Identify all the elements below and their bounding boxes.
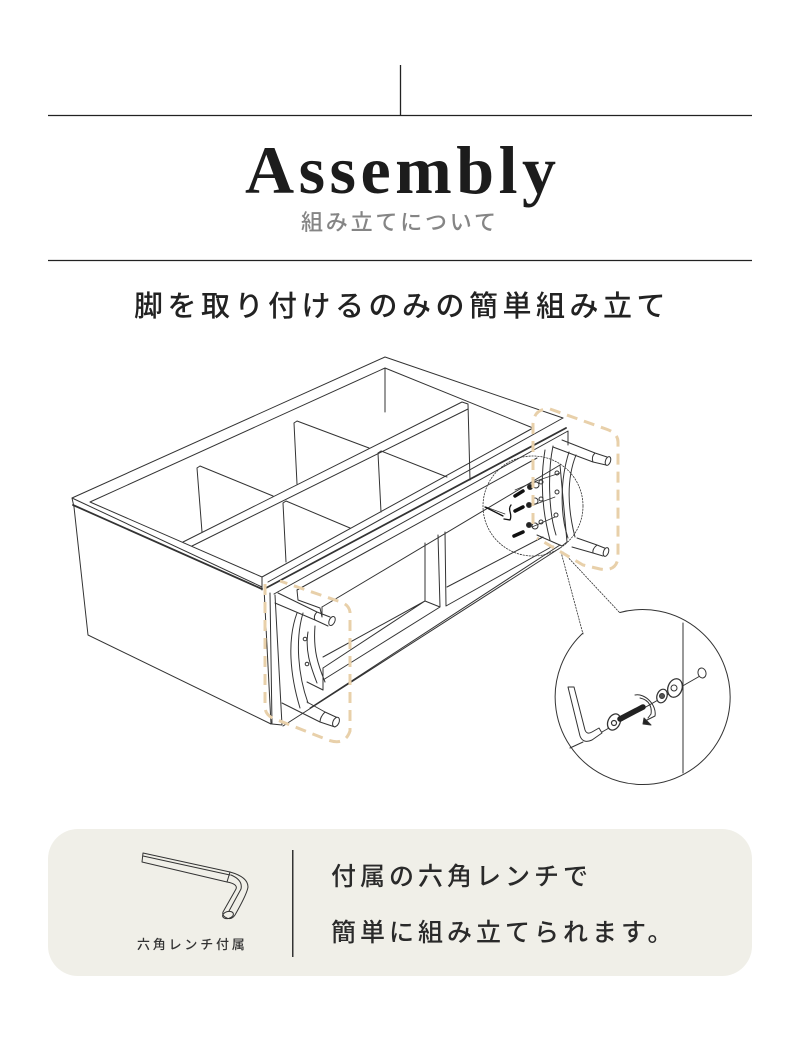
right legs: [537, 440, 612, 557]
callout connector lines: [561, 552, 620, 634]
dashed highlight left: [265, 581, 350, 742]
dividers: [183, 402, 470, 562]
detail callout source circle: [483, 456, 583, 556]
heading: 脚を取り付けるのみの簡単組み立て: [134, 290, 670, 323]
furniture body: [72, 357, 568, 724]
bolt hole: [697, 667, 707, 679]
icon: hex wrench: [142, 853, 248, 920]
bottom panel: [48, 829, 752, 976]
title: Assembly: [245, 132, 556, 208]
panel text line 1: 付属の六角レンチで: [331, 863, 592, 891]
panel text line 2: 簡単に組み立てられます。: [331, 919, 677, 947]
underside frame: [264, 532, 560, 726]
panel divider: [292, 850, 294, 957]
hex key: [568, 687, 602, 741]
wall lines: [570, 623, 700, 773]
detail circle: [555, 610, 730, 785]
washers: [655, 677, 685, 704]
furniture illustration: [72, 357, 620, 728]
panel background: [48, 829, 752, 976]
subtitle: 組み立てについて: [301, 210, 499, 235]
left legs: [275, 593, 341, 728]
screw: [605, 707, 643, 732]
wrench caption: 六角レンチ付属: [137, 937, 248, 952]
exploded bolts: [485, 471, 560, 536]
rotation arrow: [635, 695, 655, 725]
dashed highlight right: [533, 409, 618, 570]
